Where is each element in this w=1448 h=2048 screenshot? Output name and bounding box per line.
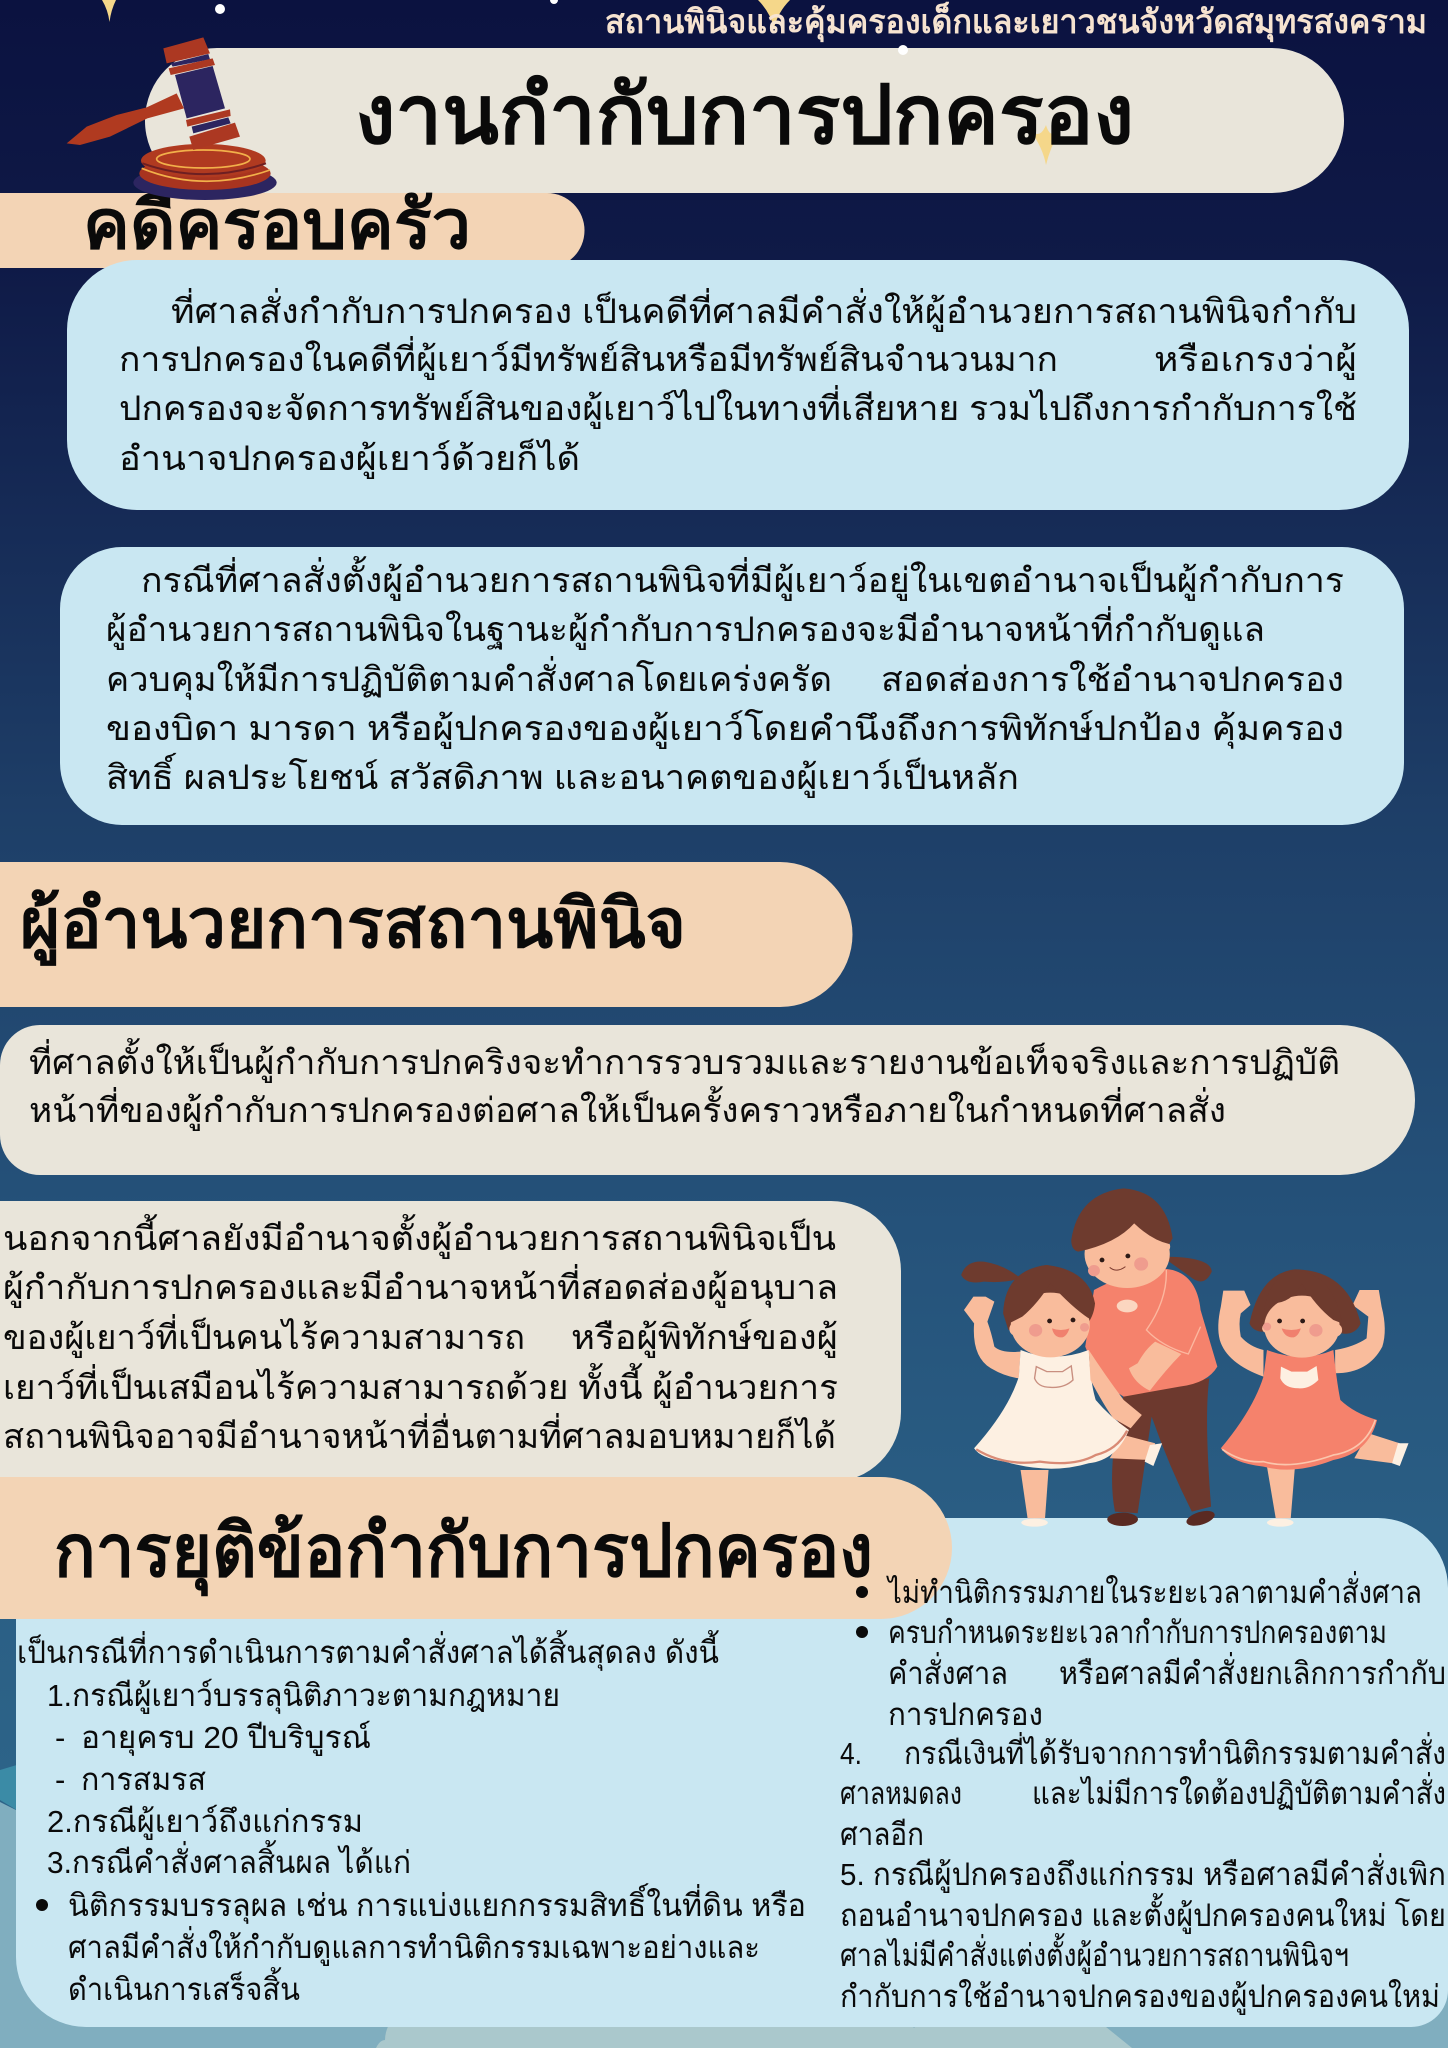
panel: additional duties: หรือผู้พิทักษ์ของผู้: [571, 1319, 838, 1358]
panel: family case description: ที่ศาลสั่งกำกับการปกครอง เป็นคดีที่ศาลมีคำสั่งให้ผู้อำนวยการสถานพินิจกำกับ: [171, 288, 1357, 332]
heading pill: director: [0, 862, 852, 1007]
panel: family case description: หรือเกรงว่าผู้: [1154, 341, 1357, 380]
heading pill: termination: [0, 1477, 952, 1619]
office name: สถานพินิจและคุ้มครองเด็กและเยาวชนจังหวัดสมุทรสงคราม: [605, 1, 1427, 43]
panel: director as supervisor: สอดส่องการใช้อำนาจปกครอง: [881, 660, 1344, 699]
text block: termination left column: นิติกรรมบรรลุผล เช่น การแบ่งแยกกรรมสิทธิ์ในที่ดิน หรือ: [68, 1882, 806, 1925]
text block: termination right column: 4.: [840, 1736, 862, 1771]
panel: director as supervisor: ของบิดา มารดา หรือผู้ปกครองของผู้เยาว์โดยคำนึงถึงการพิทักษ์ปกป้อง คุ้มครอง: [106, 709, 1344, 749]
panel: court report duty: หน้าที่ของผู้กำกับการปกครองต่อศาลให้เป็นครั้งคราวหรือภายในกำหนดที่ศาลสั่ง: [29, 1086, 1226, 1131]
panel: court report duty: [0, 1025, 1415, 1175]
heading pill: director: ผู้อำนวยการสถานพินิจ: [20, 886, 686, 967]
panel: additional duties: เยาว์ที่เป็นเสมือนไร้ความสามารถด้วย ทั้งนี้ ผู้อำนวยการ: [3, 1363, 838, 1408]
text block: termination right column: คำสั่งศาล: [888, 1652, 1008, 1691]
star on title pill: [1030, 125, 1060, 165]
panel: additional duties: ของผู้เยาว์ที่เป็นคนไร้ความสามารถ: [3, 1314, 525, 1358]
panel: additional duties: ผู้กำกับการปกครองและมีอำนาจหน้าที่สอดส่องผู้อนุบาล: [3, 1264, 838, 1308]
text block: termination left column: อายุครบ 20 ปีบริบูรณ์: [81, 1720, 371, 1757]
panel: additional duties: นอกจากนี้ศาลยังมีอำนาจตั้งผู้อำนวยการสถานพินิจเป็น: [3, 1214, 836, 1259]
left child: [1021, 1470, 1049, 1518]
heading pill: family cases: คดีครอบครัว: [83, 187, 471, 263]
main title: งานกำกับการปกครอง: [355, 70, 1134, 161]
text block: termination left column: เป็นกรณีที่การดำเนินการตามคำสั่งศาลได้สิ้นสุดลง ดังนี้: [17, 1630, 719, 1672]
illustration: mother and two children: [961, 1188, 1409, 1529]
dot on title pill: [898, 45, 908, 55]
panel: director as supervisor: ควบคุมให้มีการปฏิบัติตามคำสั่งศาลโดยเคร่งครัด: [106, 656, 832, 700]
text block: termination left column: [17, 1630, 806, 2007]
panel: director as supervisor: สิทธิ์ ผลประโยชน์ สวัสดิภาพ และอนาคตของผู้เยาว์เป็นหลัก: [106, 752, 1019, 798]
text block: termination left column: -: [55, 1762, 65, 1797]
mother: [1162, 1257, 1212, 1281]
icon: gavel: [67, 37, 277, 200]
text block: termination left column: ดำเนินการเสร็จสิ้น: [68, 1967, 300, 2007]
panel: director as supervisor: ผู้อำนวยการสถานพินิจในฐานะผู้กำกับการปกครองจะมีอำนาจหน้าที่กำกับดูแล: [106, 606, 1265, 650]
text block: termination left column: 2.กรณีผู้เยาว์ถึงแก่กรรม: [47, 1804, 363, 1840]
text block: termination left column: การสมรส: [81, 1762, 206, 1797]
text block: termination right column: ศาลไม่มีคำสั่งแต่งตั้งผู้อำนวยการสถานพินิจฯ: [840, 1933, 1349, 1974]
text block: termination left column: -: [55, 1720, 65, 1755]
panel: family case description: [67, 260, 1409, 510]
panel: family case description: การปกครองในคดีที่ผู้เยาว์มีทรัพย์สินหรือมีทรัพย์สินจำนวนมาก: [119, 336, 1058, 380]
panel: director as supervisor: [60, 547, 1404, 825]
right child: [1267, 1467, 1295, 1518]
text block: termination right column: ศาลอีก: [840, 1817, 924, 1852]
text block: termination right column: การปกครอง: [888, 1697, 1043, 1732]
heading pill: family cases: [0, 187, 584, 268]
text block: termination right column: [840, 1571, 1446, 2015]
panel: additional duties: [0, 1201, 901, 1482]
decorative stars: [102, 0, 790, 28]
panel: family case description: อำนาจปกครองผู้เยาว์ด้วยก็ได้: [119, 438, 580, 479]
panel: additional duties: สถานพินิจอาจมีอำนาจหน้าที่อื่นตามที่ศาลมอบหมายก็ได้: [3, 1413, 836, 1456]
panel: termination details: [16, 1518, 1448, 2027]
panel: court report duty: ที่ศาลตั้งให้เป็นผู้กำกับการปกคริงจะทำการรวบรวมและรายงานข้อเท็จจริงและการปฏิบัติ: [29, 1038, 1340, 1083]
panel: family case description: ปกครองจะจัดการทรัพย์สินของผู้เยาว์ไปในทางที่เสียหาย รวมไปถึงการกำกับการใช้: [119, 385, 1357, 429]
text block: termination left column: 1.กรณีผู้เยาว์บรรลุนิติภาวะตามกฎหมาย: [47, 1678, 560, 1715]
heading pill: termination: การยุติข้อกำกับการปกครอง: [54, 1511, 873, 1597]
title pill: [145, 48, 1344, 193]
text block: termination right column: ศาลหมดลง: [840, 1776, 962, 1811]
text block: termination left column: 3.กรณีคำสั่งศาลสิ้นผล ได้แก่: [47, 1840, 411, 1880]
panel: director as supervisor: กรณีที่ศาลสั่งตั้งผู้อำนวยการสถานพินิจที่มีผู้เยาว์อยู่ในเขตอำนาจเป็นผู้กำกับการ: [141, 556, 1344, 601]
text block: termination left column: ศาลมีคำสั่งให้กำกับดูแลการทำนิติกรรมเฉพาะอย่างและ: [68, 1926, 760, 1966]
